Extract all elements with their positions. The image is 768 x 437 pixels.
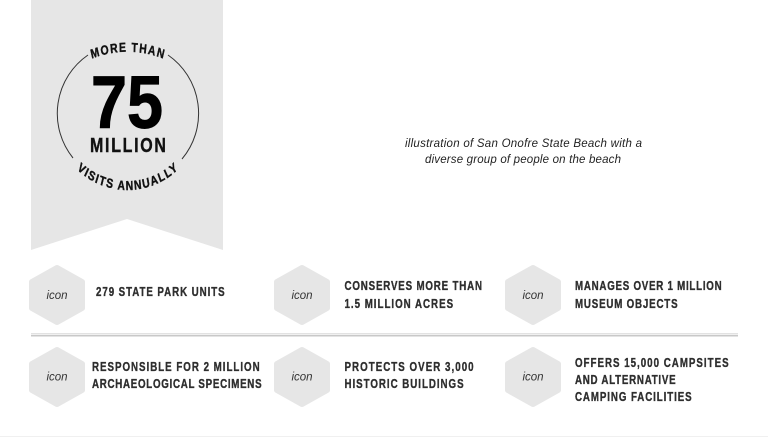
stat: acres conserved [277, 268, 482, 322]
ribbon background [31, 0, 223, 250]
stat: archaeological specimens [32, 350, 262, 404]
stat: historic buildings [277, 350, 474, 404]
million label: MILLION [90, 134, 166, 156]
curved text: visits annually: VISITS ANNUALLY [78, 162, 176, 190]
stat: acres conserved: 1.5 MILLION ACRES [344, 298, 454, 311]
stat: museum objects: MANAGES OVER 1 MILLION [575, 280, 722, 293]
stat: campsites: OFFERS 15,000 CAMPSITES [575, 357, 729, 370]
stat: state park units: 279 STATE PARK UNITS [96, 286, 225, 299]
stat: museum objects: icon [522, 290, 544, 302]
stat: historic buildings: PROTECTS OVER 3,000 [344, 361, 474, 374]
panel: ribbon badge [31, 0, 223, 250]
stat: museum objects: MUSEUM OBJECTS [575, 298, 678, 311]
curved text: more than: MORE THAN [90, 42, 165, 59]
stat: historic buildings: icon [291, 372, 313, 384]
illustration placeholder caption: diverse group of people on the beach [425, 154, 621, 166]
big number: 75 [91, 61, 163, 144]
stat: museum objects [508, 268, 722, 322]
stat: campsites [508, 350, 729, 404]
stat: historic buildings: HISTORIC BUILDINGS [344, 378, 464, 391]
stat: acres conserved: icon [291, 290, 313, 302]
stat: state park units: icon [46, 290, 68, 302]
stat: campsites: icon [522, 372, 544, 384]
illustration placeholder caption [405, 138, 642, 166]
illustration placeholder caption: illustration of San Onofre State Beach with a [405, 138, 642, 150]
stat: campsites: CAMPING FACILITIES [575, 391, 692, 404]
stat: archaeological specimens: RESPONSIBLE FOR 2 MILLION [92, 361, 260, 374]
stat: state park units [32, 268, 225, 322]
stat: archaeological specimens: icon [46, 372, 68, 384]
stat: acres conserved: CONSERVES MORE THAN [344, 280, 482, 293]
divider [31, 333, 738, 336]
stat: archaeological specimens: ARCHAEOLOGICAL SPECIMENS [92, 378, 262, 391]
circle outline [57, 55, 199, 159]
stat: campsites: AND ALTERNATIVE [575, 374, 676, 387]
